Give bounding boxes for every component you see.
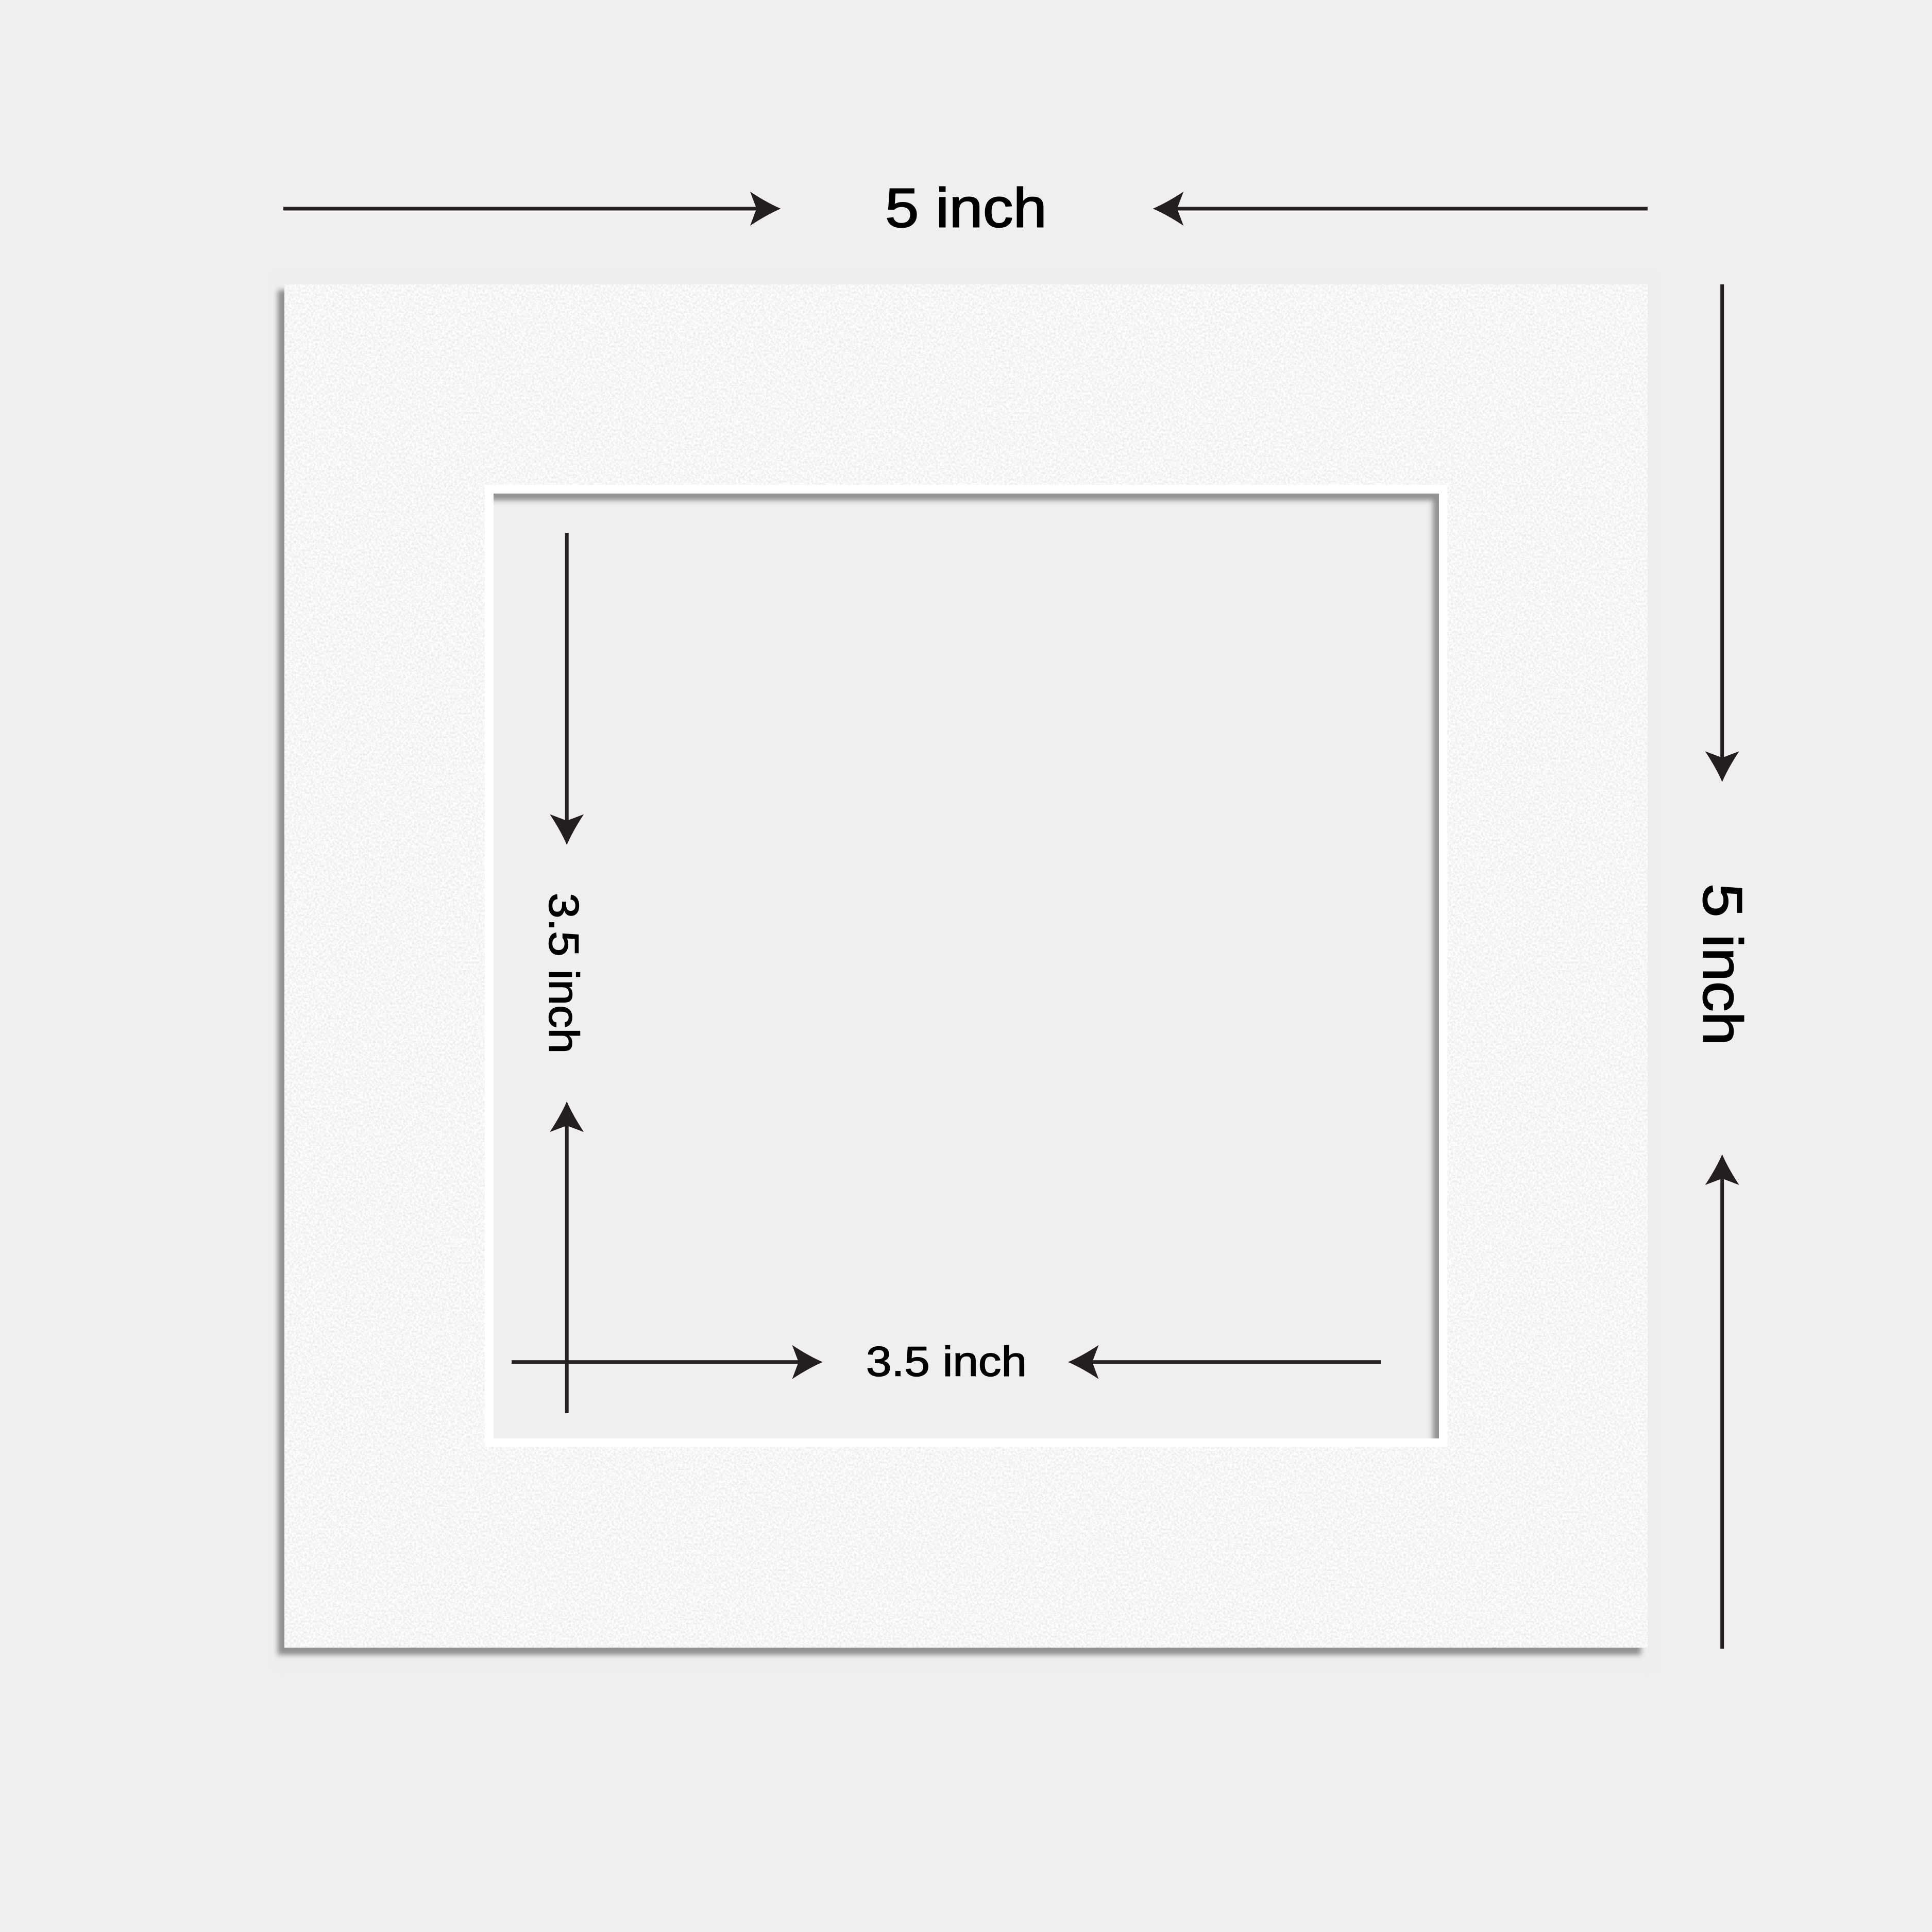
arrow: right bottom, pointing up bbox=[1705, 1154, 1739, 1649]
arrow: inner vertical bottom, pointing up bbox=[550, 1101, 584, 1413]
label: inner width 3.5 inch: 3.5 inch bbox=[866, 1338, 1027, 1385]
arrow: top right, pointing left bbox=[1153, 192, 1648, 226]
arrow: inner vertical top, pointing down bbox=[550, 533, 584, 845]
label: inner height 3.5 inch: 3.5 inch bbox=[540, 893, 587, 1054]
bevel white frame bbox=[485, 485, 1447, 1447]
opening bbox=[494, 494, 1439, 1438]
arrow: inner horizontal right, pointing left bbox=[1068, 1345, 1381, 1379]
arrow: inner horizontal left, pointing right bbox=[512, 1345, 823, 1379]
arrow: top left, pointing right bbox=[283, 192, 781, 226]
label: right height 5 inch: 5 inch bbox=[1692, 884, 1754, 1045]
arrow: right top, pointing down bbox=[1705, 284, 1739, 782]
faint halo around mat bbox=[274, 273, 1658, 1670]
mat textured surface bbox=[284, 284, 1648, 1648]
label: top width 5 inch: 5 inch bbox=[885, 177, 1047, 239]
panel: white mat board with square opening bbox=[284, 284, 1648, 1648]
opening inner shadow bbox=[494, 494, 1439, 1438]
mat drop shadow bbox=[278, 290, 1641, 1655]
infographic canvas bbox=[274, 187, 1744, 1658]
